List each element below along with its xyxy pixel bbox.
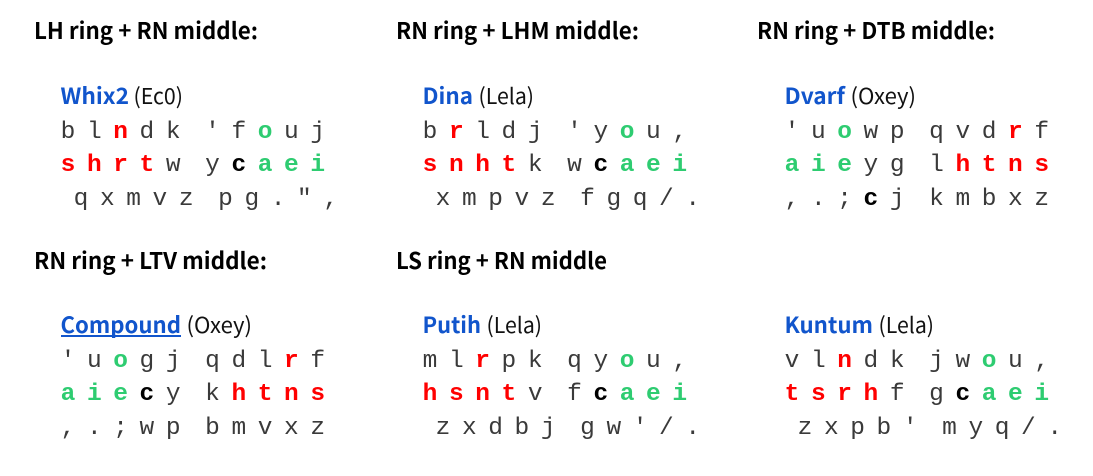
panel: RN ring + DTB middle: [757, 12, 1049, 213]
layout name: Compound: [60, 308, 252, 340]
key rows: Kuntum: [785, 348, 1062, 442]
layout name: Whix2: (Ec0): [134, 79, 183, 111]
key rows: Compound: [61, 348, 325, 442]
layout name: Compound: (Oxey): [186, 308, 252, 340]
key rows: Dina: b r ldj'y o u,: [423, 119, 687, 146]
layout name: Dina: [422, 79, 534, 111]
layout name: Dvarf: (Oxey): [850, 79, 916, 111]
key rows: Compound: 'u o gjqdl r f: [61, 348, 325, 375]
key rows: Dvarf: aie ygl htns: [785, 152, 1049, 179]
heading: RN ring + LTV middle: RN ring + LTV middle:: [34, 242, 267, 276]
layout name: Dina: Dina: [422, 79, 473, 111]
layout name: Whix2: [60, 79, 183, 111]
layout name: Kuntum: (Lela): [878, 308, 934, 340]
key rows: Putih: [423, 348, 700, 442]
heading: LS ring + RN middle: LS ring + RN middle: [396, 242, 607, 276]
key rows: Whix2: shrt wy c aei: [61, 152, 325, 179]
key rows: Kuntum: tsrh fg c aei: [785, 381, 1049, 408]
key rows: Whix2: bl n dk'f o uj: [61, 119, 325, 146]
key rows: Compound: aie c yk htns: [61, 381, 325, 408]
key rows: Dvarf: ,.; c jkmbxz: [785, 186, 1049, 213]
key rows: Putih: ml r pkqy o u,: [423, 348, 687, 375]
key rows: Dina: xmpvzfgq/.: [436, 186, 700, 213]
key rows: Dina: snht kw c aei: [423, 152, 687, 179]
layout name: Putih: [422, 308, 542, 340]
key rows: Putih: hsnt vf c aei: [423, 381, 687, 408]
layout name: Kuntum: [784, 308, 934, 340]
layout name: Whix2: Whix2: [60, 79, 129, 111]
layout name: Putih: Putih: [422, 308, 481, 340]
layout name: Dvarf: [784, 79, 916, 111]
layout name: Putih: (Lela): [486, 308, 542, 340]
heading: RN ring + LHM middle: RN ring + LHM middle:: [396, 12, 639, 46]
key rows: Whix2: qxmvzpg.",: [74, 186, 338, 213]
key rows: Dvarf: 'u o wpqvd r f: [785, 119, 1049, 146]
key rows: Kuntum: zxpb'myq/.: [798, 415, 1062, 442]
panel: RN ring + LTV middle: [34, 242, 325, 442]
panel: Kuntum: [784, 308, 1062, 442]
panel: LS ring + RN middle, Putih: [396, 242, 700, 442]
heading: RN ring + DTB middle: RN ring + DTB middle:: [757, 12, 995, 46]
key rows: Kuntum: vl n dkjw o u,: [785, 348, 1049, 375]
key rows: Dina: [423, 119, 700, 213]
key rows: Dvarf: [785, 119, 1049, 213]
layout name: Dvarf: Dvarf: [784, 79, 847, 111]
key rows: Putih: zxdbjgw'/.: [436, 415, 700, 442]
layout name: Dina: (Lela): [478, 79, 534, 111]
panel: RN ring + LHM middle: [396, 12, 700, 213]
layout name: Kuntum: Kuntum: [784, 308, 873, 340]
heading: LH ring + RN middle: LH ring + RN middle:: [34, 12, 258, 46]
layout name: Compound: Compound: [60, 308, 181, 340]
key rows: Compound: ,.;wpbmvxz: [61, 415, 325, 442]
key rows: Whix2: [61, 119, 338, 213]
panel: LH ring + RN middle: [34, 12, 338, 213]
